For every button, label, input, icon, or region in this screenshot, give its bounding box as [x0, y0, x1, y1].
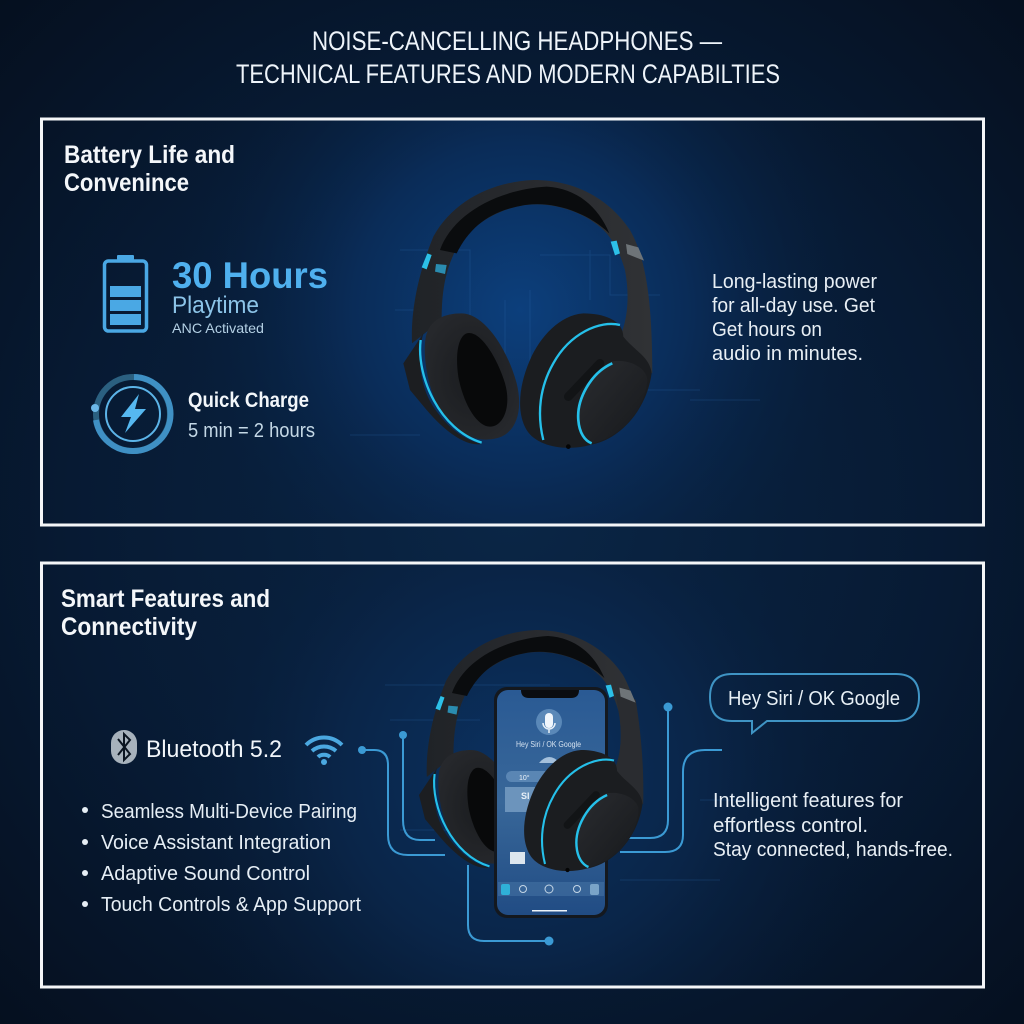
feature list: Touch Controls & App Support	[101, 894, 361, 916]
label: bluetooth 5.2: Bluetooth 5.2	[146, 736, 282, 763]
heading: battery life: Battery Life and	[64, 141, 235, 169]
phone	[494, 687, 608, 918]
speech bubble: hey siri	[710, 674, 919, 733]
text: long-lasting power: Get hours on	[712, 319, 822, 341]
feature list: Voice Assistant Integration	[101, 832, 331, 854]
phone: 10°	[519, 774, 530, 782]
stat: 30 hours playtime	[172, 255, 328, 336]
panel: smart features and connectivity	[42, 563, 984, 987]
icon: bluetooth	[111, 730, 137, 764]
headphones: bottom, right cup	[524, 685, 643, 872]
text: long-lasting power: Long-lasting power	[712, 271, 877, 293]
heading: smart features: Smart Features and	[61, 585, 270, 613]
title	[236, 26, 780, 89]
text: quick charge	[188, 389, 315, 442]
feature list	[82, 801, 361, 916]
text: quick charge: Quick Charge	[188, 389, 309, 412]
text: long-lasting power: for all-day use. Get	[712, 295, 875, 317]
text: intelligent features: effortless control.	[713, 815, 868, 837]
text: long-lasting power	[712, 271, 877, 365]
headphones: top	[403, 180, 652, 449]
text: intelligent features: Stay connected, hands-free.	[713, 839, 953, 861]
feature list: Adaptive Sound Control	[101, 863, 310, 885]
text: intelligent features: Intelligent features for	[713, 790, 903, 812]
headphones: bottom, band and left cup	[419, 630, 643, 868]
phone: SI	[521, 791, 530, 801]
title: TECHNICAL FEATURES AND MODERN CAPABILTIES	[236, 59, 780, 89]
icon: quick charge	[91, 377, 171, 451]
stat: 30 hours playtime: Playtime	[172, 292, 259, 319]
panel: battery life and convenience	[42, 119, 984, 525]
icon: wifi	[306, 738, 342, 765]
text: long-lasting power: audio in minutes.	[712, 343, 863, 365]
stat: 30 hours playtime: ANC Activated	[172, 320, 264, 336]
connector lines	[358, 702, 722, 946]
text: quick charge: 5 min = 2 hours	[188, 420, 315, 442]
stat: 30 hours playtime: 30 Hours	[172, 255, 328, 296]
text: intelligent features	[713, 790, 953, 861]
feature list: Seamless Multi-Device Pairing	[101, 801, 357, 823]
heading: smart features: Connectivity	[61, 613, 197, 641]
icon: battery	[104, 255, 146, 331]
phone label: Hey Siri / OK Google	[516, 740, 581, 749]
title: NOISE-CANCELLING HEADPHONES —	[312, 26, 722, 56]
speech bubble: hey siri: Hey Siri / OK Google	[728, 688, 900, 710]
heading: battery life	[64, 141, 235, 197]
heading: smart features	[61, 585, 270, 641]
heading: battery life: Convenince	[64, 169, 189, 197]
